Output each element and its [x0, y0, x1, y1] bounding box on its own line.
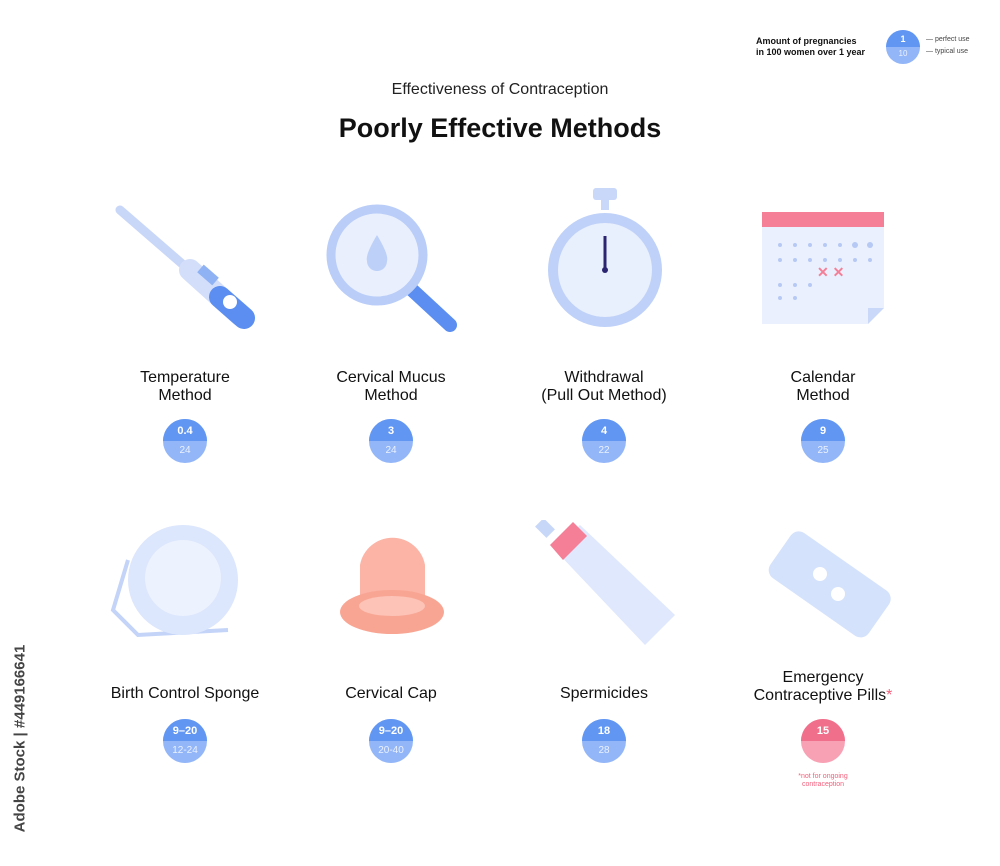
circle: 3/24: 24	[385, 445, 397, 456]
label: emergency	[754, 669, 892, 704]
icon: magnifier	[326, 204, 457, 332]
circle: 18/28: 28	[598, 745, 610, 756]
label: sponge: Birth Control Sponge	[111, 685, 259, 702]
legend keys: — typical use	[926, 48, 968, 55]
circle: 18/28	[582, 719, 626, 763]
label: mucus	[336, 369, 446, 404]
legend keys: — perfect use	[926, 36, 970, 43]
label: calendar	[791, 369, 856, 404]
label: cap: Cervical Cap	[345, 685, 437, 702]
watermark id: Adobe Stock | #449166641	[12, 645, 28, 832]
circle: 3/24	[369, 419, 413, 463]
circle: 9-20/20-40: 20-40	[378, 745, 404, 756]
subtitle: Effectiveness of Contraception	[392, 81, 608, 98]
circle: 9-20/12-24: 12-24	[172, 745, 198, 756]
icon: pill pack	[768, 531, 891, 638]
label: emergency: Contraceptive Pills*	[754, 687, 892, 704]
icon: stopwatch	[548, 188, 662, 327]
legend circle: 1	[900, 34, 906, 44]
label: withdrawal: Withdrawal	[564, 369, 644, 386]
legend keys	[926, 36, 970, 55]
label: emergency: Emergency	[783, 669, 863, 686]
circle: 0.4/24: 0.4	[177, 425, 193, 437]
circle: 0.4/24: 24	[179, 445, 191, 456]
footnote	[798, 772, 848, 788]
legend text: in 100 women over 1 year	[756, 47, 865, 57]
label: temperature: Method	[158, 387, 212, 404]
circle: 3/24: 3	[388, 425, 394, 437]
title: Poorly Effective Methods	[339, 113, 661, 143]
circle: 9-20/12-24: 9–20	[173, 725, 197, 737]
legend circle: 10	[899, 49, 907, 58]
circle: 4/22: 4	[601, 425, 607, 437]
footnote: contraception	[802, 781, 844, 788]
label: calendar: Calendar	[791, 369, 855, 386]
circle: 9-20/20-40: 9–20	[379, 725, 403, 737]
icon: calendar: ✕ ✕	[817, 264, 844, 280]
icon: sponge	[110, 525, 238, 637]
legend	[756, 30, 970, 64]
label: withdrawal: (Pull Out Method)	[541, 387, 667, 404]
circle: 9/25: 25	[817, 445, 829, 456]
circle: 9/25: 9	[820, 425, 826, 437]
icon: tube	[535, 520, 675, 645]
legend text	[756, 36, 865, 57]
circle: 9-20/20-40	[369, 719, 413, 763]
label: temperature	[140, 369, 230, 404]
label: mucus: Method	[364, 387, 418, 404]
circle: 0.4/24	[163, 419, 207, 463]
circle: 18/28: 18	[598, 725, 610, 737]
label: temperature: Temperature	[140, 369, 230, 386]
circle: 9-20/12-24	[163, 719, 207, 763]
icon: cervical cap	[340, 538, 444, 634]
footnote: *not for ongoing	[798, 773, 848, 780]
label: withdrawal	[541, 369, 667, 404]
legend text: Amount of pregnancies	[756, 36, 857, 46]
icon: calendar	[762, 212, 884, 324]
circle: 15 pink: 15	[817, 725, 829, 737]
circle: 15 pink	[801, 719, 845, 763]
icon: thermometer	[116, 206, 255, 329]
circle: 4/22	[582, 419, 626, 463]
label: calendar: Method	[796, 387, 850, 404]
label: mucus: Cervical Mucus	[336, 369, 446, 386]
circle: 4/22: 22	[598, 445, 610, 456]
label: spermicides: Spermicides	[560, 685, 648, 702]
legend circle	[886, 30, 920, 64]
circle: 9/25	[801, 419, 845, 463]
